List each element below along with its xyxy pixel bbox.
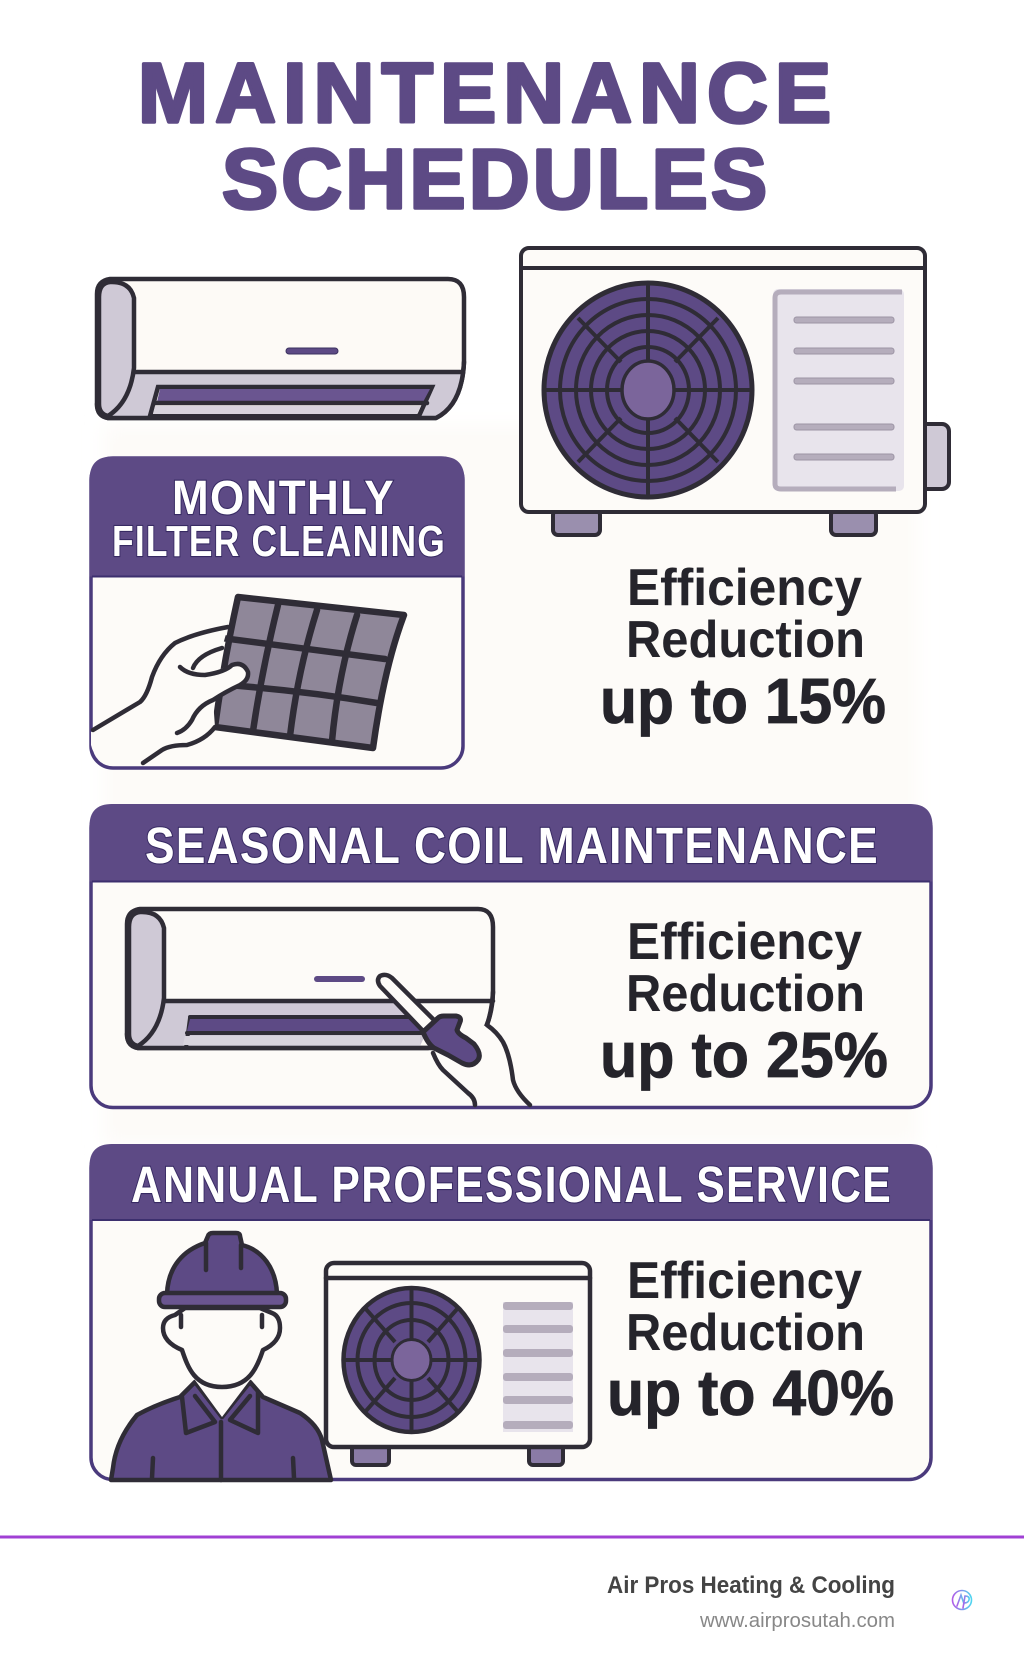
- header band: [90, 1144, 932, 1220]
- icon: hand with screwdriver: [378, 975, 530, 1105]
- hard hat: [167, 1233, 277, 1294]
- panel: seasonal coil maintenance: [90, 804, 932, 1108]
- panel: monthly filter cleaning: [90, 456, 464, 768]
- text: efficiency reduction up to 25%: Efficiency: [627, 913, 862, 971]
- footer website: www.airprosutah.com: [699, 1610, 895, 1632]
- text: efficiency reduction up to 15%: up to 15%: [600, 665, 886, 737]
- icon: outdoor condenser unit: [521, 248, 949, 535]
- text: efficiency reduction up to 40%: Reduction: [626, 1304, 865, 1362]
- heading: ANNUAL PROFESSIONAL SERVICE: [131, 1156, 892, 1213]
- text: efficiency reduction up to 25%: [600, 913, 888, 1091]
- icon: logo: [952, 1590, 972, 1610]
- icon: technician in hard hat: [111, 1233, 331, 1480]
- icon: indoor unit being serviced: [127, 909, 493, 1048]
- panel: monthly filter cleaning: FILTER CLEANING: [112, 517, 446, 566]
- icon: air filter: [214, 597, 404, 748]
- icon: indoor air conditioner unit: [97, 279, 464, 418]
- heading: SEASONAL COIL MAINTENANCE: [145, 817, 879, 874]
- text: efficiency reduction up to 25%: up to 25%: [600, 1019, 888, 1091]
- text: efficiency reduction up to 40%: [607, 1252, 894, 1429]
- title: SCHEDULES: [222, 132, 767, 226]
- icon: outdoor unit small: [326, 1263, 590, 1465]
- side valve box: [920, 424, 949, 489]
- louver panel: [773, 289, 904, 491]
- fan grille: [544, 283, 752, 497]
- title: MAINTENANCE: [138, 46, 831, 140]
- title: [138, 46, 831, 226]
- cabinet: [521, 248, 925, 512]
- text: efficiency reduction up to 15%: [600, 559, 886, 737]
- text: efficiency reduction up to 40%: Efficiency: [627, 1252, 862, 1310]
- panel: annual professional service: [90, 1144, 932, 1480]
- neck and head: [195, 1370, 250, 1417]
- heading: MONTHLY: [172, 472, 395, 525]
- text: efficiency reduction up to 15%: Reduction: [626, 611, 865, 669]
- footer company name: Air Pros Heating & Cooling: [607, 1572, 895, 1599]
- text: efficiency reduction up to 15%: Efficiency: [627, 559, 862, 617]
- text: efficiency reduction up to 25%: Reduction: [626, 965, 865, 1023]
- header band: [90, 804, 932, 882]
- shirt: [111, 1382, 331, 1480]
- feet: [553, 510, 600, 535]
- header band: [90, 456, 464, 576]
- icon: hand holding filter: [91, 627, 248, 763]
- text: efficiency reduction up to 40%: up to 40%: [607, 1357, 894, 1429]
